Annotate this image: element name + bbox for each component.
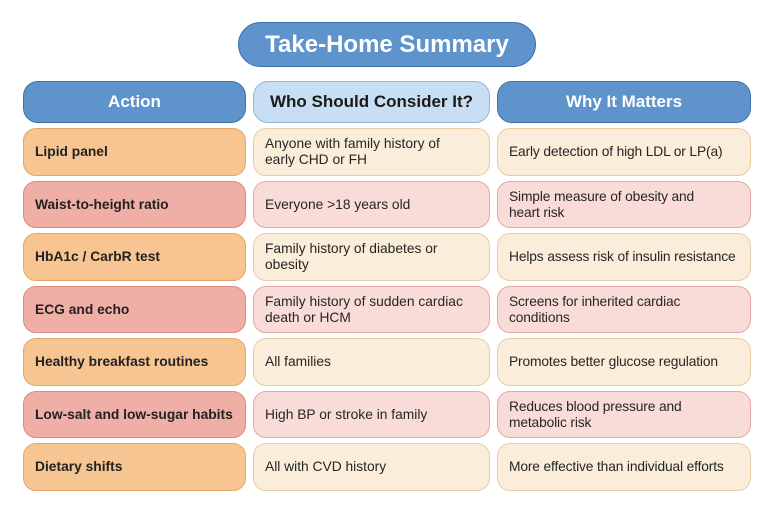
row 4 action: ECG and echo — [35, 302, 129, 316]
row 5 action — [23, 338, 246, 386]
row 4 why: conditions — [509, 310, 570, 324]
row 3 who: Family history of diabetes or — [265, 241, 438, 256]
row 6 who: High BP or stroke in family — [265, 406, 427, 422]
header: Action: Action — [108, 92, 161, 111]
row 1 why: Early detection of high LDL or LP(a) — [509, 144, 722, 159]
row 5 why — [497, 338, 751, 386]
row 5 who: All families — [265, 354, 331, 369]
row 4 action — [23, 286, 246, 333]
row 7 why: More effective than individual efforts — [509, 459, 724, 474]
row 4 who: Family history of sudden cardiac — [265, 294, 463, 308]
row 3 who — [253, 233, 490, 281]
row 2 who: Everyone >18 years old — [265, 196, 410, 212]
row 7 action: Dietary shifts — [35, 459, 122, 474]
row 4 who — [253, 286, 490, 333]
header: Who Should Consider It?: Who Should Consider It? — [270, 92, 473, 111]
row 7 who — [253, 443, 490, 491]
row 1 action — [23, 128, 246, 176]
title: Take-Home Summary — [265, 30, 509, 58]
row 7 who: All with CVD history — [265, 459, 386, 474]
header: Why It Matters: Why It Matters — [566, 92, 682, 111]
row 1 who: Anyone with family history of — [265, 136, 440, 151]
row 6 why: Reduces blood pressure and — [509, 398, 682, 414]
header: Action — [23, 81, 246, 123]
row 6 why: metabolic risk — [509, 414, 591, 430]
row 6 action: Low-salt and low-sugar habits — [35, 406, 233, 422]
row 2 action — [23, 181, 246, 228]
row 1 who — [253, 128, 490, 176]
row 1 who: early CHD or FH — [265, 152, 367, 167]
row 7 why — [497, 443, 751, 491]
row 5 action: Healthy breakfast routines — [35, 354, 208, 369]
row 3 action — [23, 233, 246, 281]
row 6 why — [497, 391, 751, 438]
row 5 why: Promotes better glucose regulation — [509, 354, 718, 369]
row 3 why — [497, 233, 751, 281]
row 1 why — [497, 128, 751, 176]
row 5 who — [253, 338, 490, 386]
header: Why It Matters — [497, 81, 751, 123]
row 7 action — [23, 443, 246, 491]
row 2 action: Waist-to-height ratio — [35, 196, 169, 212]
row 4 why — [497, 286, 751, 333]
row 3 why: Helps assess risk of insulin resistance — [509, 249, 736, 264]
row 3 who: obesity — [265, 257, 309, 272]
row 4 who: death or HCM — [265, 310, 351, 324]
header: Who Should Consider It? — [253, 81, 490, 123]
row 2 who — [253, 181, 490, 228]
row 3 action: HbA1c / CarbR test — [35, 249, 160, 264]
row 2 why — [497, 181, 751, 228]
row 1 action: Lipid panel — [35, 144, 108, 159]
title — [238, 22, 536, 67]
row 6 action — [23, 391, 246, 438]
row 4 why: Screens for inherited cardiac — [509, 294, 680, 308]
row 2 why: Simple measure of obesity and — [509, 188, 694, 204]
row 6 who — [253, 391, 490, 438]
row 2 why: heart risk — [509, 204, 564, 220]
